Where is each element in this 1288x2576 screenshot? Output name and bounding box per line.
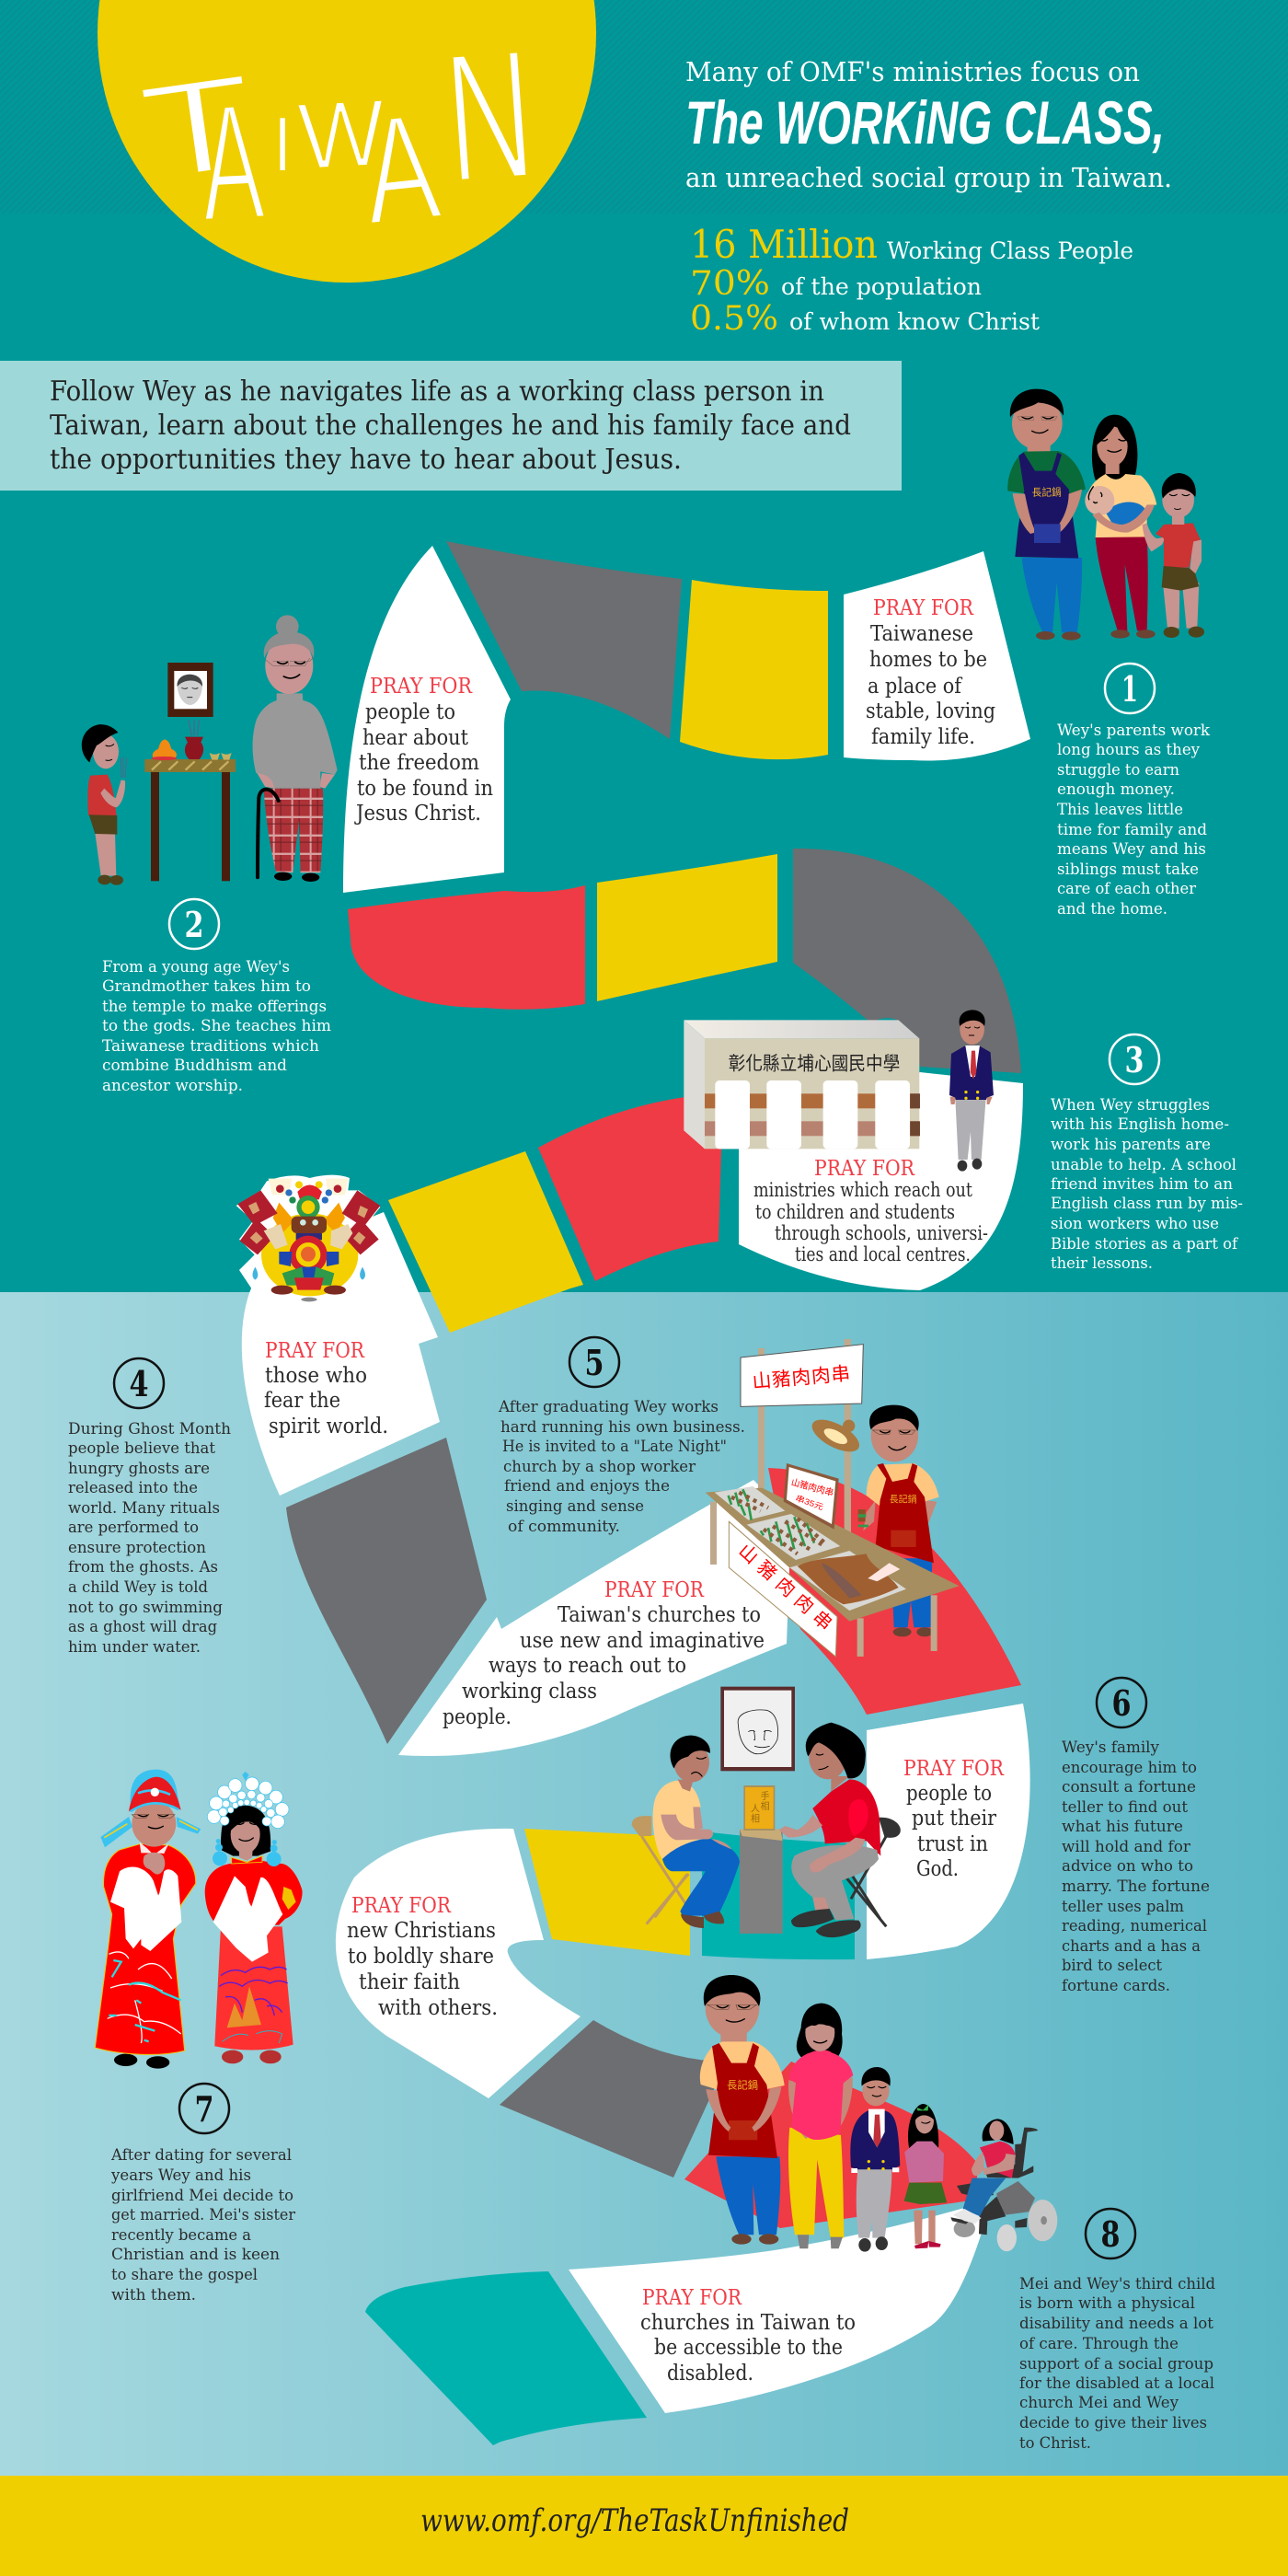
badge 8: 8 bbox=[1100, 2213, 1121, 2255]
background: light blue lower panel bbox=[0, 1292, 1288, 2477]
step 6: Wey's family bbox=[1062, 1739, 1159, 1757]
step 4: from the ghosts. As bbox=[68, 1558, 218, 1577]
step 7: recently became a bbox=[111, 2226, 251, 2245]
step 8: for the disabled at a local bbox=[1019, 2374, 1214, 2393]
badge 7: 7 bbox=[195, 2088, 213, 2130]
pray block: ministries to students: ties and local centres. bbox=[795, 1243, 971, 1265]
step 2: the temple to make offerings bbox=[102, 998, 327, 1016]
step 3: work his parents are bbox=[1051, 1136, 1211, 1154]
step 1: means Wey and his bbox=[1057, 840, 1206, 859]
step 6: teller to find out bbox=[1062, 1798, 1188, 1817]
pray block: new Christians: PRAY FOR bbox=[351, 1894, 452, 1918]
step 4: people believe that bbox=[68, 1439, 215, 1458]
pray block: freedom in Christ: people to bbox=[365, 700, 455, 724]
badge 8 bbox=[1086, 2209, 1135, 2258]
pray block: new Christians: with others. bbox=[378, 1996, 498, 2020]
illustration: Wey's family: 長記鍋 bbox=[1032, 486, 1062, 498]
step 5: friend and enjoys the bbox=[504, 1477, 670, 1496]
title: Taiwan bbox=[132, 9, 540, 257]
background: teal bbox=[0, 0, 1288, 1293]
illustration: fortune teller scene: 人 bbox=[751, 1803, 760, 1814]
badge 1: 1 bbox=[1121, 668, 1138, 710]
badge 5 bbox=[569, 1337, 619, 1387]
step 1: struggle to earn bbox=[1057, 761, 1179, 780]
badge 2: 2 bbox=[184, 904, 204, 945]
step 4 bbox=[68, 1358, 231, 1657]
background: striped header band bbox=[0, 0, 1288, 214]
step 5: hard running his own business. bbox=[500, 1418, 745, 1437]
step 1: care of each other bbox=[1057, 880, 1197, 898]
pray block: trust in God bbox=[903, 1757, 1005, 1881]
pray block: trust in God: people to bbox=[906, 1782, 992, 1806]
footer band bbox=[0, 2476, 1288, 2576]
illustration: school building and student: 彰化縣立埔心國民中學 bbox=[729, 1054, 900, 1075]
step 8: decide to give their lives bbox=[1019, 2414, 1207, 2432]
step 3: When Wey struggles bbox=[1051, 1096, 1210, 1115]
illustration: Wey's family bbox=[1007, 389, 1204, 641]
sun with Taiwan title bbox=[98, 0, 596, 283]
pray block: new Christians: their faith bbox=[359, 1970, 460, 1994]
step 7 bbox=[110, 2084, 296, 2305]
pray block: spirit world: fear the bbox=[264, 1389, 340, 1413]
step 7: years Wey and his bbox=[110, 2166, 251, 2185]
illustration: food stall: 山豬肉肉串 bbox=[790, 1476, 835, 1498]
pray block: spirit world bbox=[264, 1339, 388, 1438]
pray block: Taiwan's churches: Taiwan's churches to bbox=[558, 1603, 761, 1627]
intro band: Taiwan, learn about the challenges he and his family face and bbox=[50, 410, 851, 442]
pray block: new Christians bbox=[347, 1894, 498, 2020]
step 1: Wey's parents work bbox=[1057, 722, 1211, 740]
step 7: girlfriend Mei decide to bbox=[111, 2187, 293, 2205]
step 6: reading, numerical bbox=[1062, 1917, 1207, 1935]
badge 3: 3 bbox=[1124, 1039, 1144, 1080]
badge 4 bbox=[114, 1358, 164, 1408]
step 8 bbox=[1019, 2209, 1215, 2453]
step 2: Grandmother takes him to bbox=[102, 977, 311, 996]
pray block: Taiwan's churches bbox=[443, 1578, 765, 1729]
step 3: their lessons. bbox=[1051, 1254, 1153, 1273]
badge 7 bbox=[179, 2084, 229, 2133]
game path bbox=[242, 541, 1030, 2445]
step 2: Taiwanese traditions which bbox=[102, 1037, 319, 1056]
intro band bbox=[0, 361, 902, 491]
pray block: accessible churches: be accessible to the bbox=[654, 2336, 843, 2360]
pray block: ministries to students bbox=[753, 1157, 988, 1265]
step 6 bbox=[1062, 1678, 1210, 1995]
pray block: Taiwan's churches: ways to reach out to bbox=[489, 1654, 686, 1678]
statistics: Working Class People bbox=[887, 237, 1133, 264]
footer band: www.omf.org/TheTaskUnfinished bbox=[420, 2502, 849, 2539]
step 7: to share the gospel bbox=[111, 2266, 258, 2284]
step 3: with his English home- bbox=[1051, 1115, 1229, 1134]
step 4: world. Many rituals bbox=[68, 1499, 220, 1518]
step 6: teller uses palm bbox=[1062, 1898, 1184, 1916]
pray block: freedom in Christ: PRAY FOR bbox=[370, 675, 473, 699]
step 4: as a ghost will drag bbox=[68, 1618, 217, 1636]
pray block: new Christians: new Christians bbox=[347, 1919, 496, 1943]
step 1: siblings must take bbox=[1057, 861, 1199, 879]
statistics bbox=[690, 222, 1133, 338]
pray block: accessible churches: PRAY FOR bbox=[642, 2286, 742, 2310]
step 5: He is invited to a "Late Night" bbox=[502, 1438, 727, 1456]
illustration: food stall: 串35元 bbox=[794, 1493, 825, 1512]
pray block: trust in God: trust in bbox=[917, 1832, 988, 1856]
pray block: spirit world: PRAY FOR bbox=[265, 1339, 365, 1363]
step 1: time for family and bbox=[1057, 821, 1207, 839]
step 8: disability and needs a lot bbox=[1019, 2315, 1213, 2333]
pray block: accessible churches: disabled. bbox=[667, 2362, 753, 2385]
pray block: Taiwan's churches: PRAY FOR bbox=[604, 1578, 705, 1602]
pray block: trust in God: put their bbox=[912, 1807, 996, 1831]
step 2: to the gods. She teaches him bbox=[102, 1017, 331, 1035]
illustration: fortune teller scene: 相 bbox=[761, 1800, 770, 1812]
step 5 bbox=[498, 1337, 745, 1536]
title: Taiwan: W bbox=[295, 79, 388, 190]
pray block: Taiwan's churches: use new and imaginative bbox=[520, 1629, 765, 1653]
badge 6: 6 bbox=[1111, 1682, 1132, 1724]
step 1: and the home. bbox=[1057, 900, 1167, 918]
illustration: temple boy and grandmother bbox=[82, 615, 338, 885]
pray block: ministries to students: through schools, universi- bbox=[775, 1222, 988, 1244]
illustration: fortune teller scene: 手 bbox=[761, 1790, 770, 1802]
pray block: Taiwanese homes: PRAY FOR bbox=[873, 596, 974, 620]
illustration: school building and student bbox=[684, 1010, 994, 1172]
step 8: to Christ. bbox=[1019, 2434, 1091, 2453]
badge 5: 5 bbox=[585, 1342, 604, 1383]
step 8: Mei and Wey's third child bbox=[1019, 2275, 1215, 2293]
step 5: of community. bbox=[508, 1518, 620, 1536]
step 5: church by a shop worker bbox=[503, 1458, 696, 1476]
pray block: Taiwan's churches: people. bbox=[443, 1705, 512, 1729]
illustration: food stall: 長記鍋 bbox=[890, 1494, 917, 1506]
pray block: accessible churches bbox=[640, 2286, 856, 2385]
statistics: 70% bbox=[690, 265, 770, 303]
header statement: Many of OMF's ministries focus on bbox=[685, 56, 1140, 87]
badge 4: 4 bbox=[129, 1363, 149, 1404]
title: Taiwan: A bbox=[355, 80, 446, 257]
title: Taiwan: T bbox=[132, 46, 264, 209]
step 1 bbox=[1057, 664, 1211, 918]
badge 3 bbox=[1110, 1034, 1159, 1084]
pray block: freedom in Christ: Jesus Christ. bbox=[354, 802, 481, 826]
illustration: Wey and Mei's family with wheelchair: 長記鍋 bbox=[727, 2078, 758, 2091]
step 8: of care. Through the bbox=[1019, 2335, 1179, 2353]
step 8: church Mei and Wey bbox=[1019, 2394, 1179, 2412]
pray block: ministries to students: to children and students bbox=[755, 1201, 955, 1223]
step 4: During Ghost Month bbox=[68, 1420, 231, 1438]
step 5: singing and sense bbox=[506, 1497, 644, 1516]
step 2 bbox=[102, 899, 331, 1095]
illustration: food stall bbox=[706, 1339, 960, 1657]
step 6: marry. The fortune bbox=[1062, 1877, 1210, 1896]
step 6: bird to select bbox=[1062, 1957, 1162, 1975]
badge 6 bbox=[1097, 1678, 1146, 1727]
step 8: is born with a physical bbox=[1019, 2294, 1195, 2313]
step 4: are performed to bbox=[68, 1519, 199, 1537]
step 7: After dating for several bbox=[110, 2146, 292, 2165]
pray block: Taiwanese homes: homes to be bbox=[869, 648, 987, 672]
step 4: a child Wey is told bbox=[68, 1578, 208, 1597]
badge 1 bbox=[1105, 664, 1155, 713]
step 1: This leaves little bbox=[1057, 801, 1183, 819]
title: Taiwan: A bbox=[196, 68, 268, 256]
illustration: wedding couple bbox=[95, 1770, 303, 2069]
step 5: After graduating Wey works bbox=[498, 1398, 719, 1416]
step 6: encourage him to bbox=[1062, 1759, 1197, 1777]
pray block: Taiwanese homes: family life. bbox=[871, 725, 975, 749]
pray block: Taiwanese homes: a place of bbox=[868, 675, 962, 699]
step 6: consult a fortune bbox=[1062, 1778, 1196, 1796]
step 4: hungry ghosts are bbox=[68, 1460, 210, 1478]
pray block: Taiwanese homes: Taiwanese bbox=[870, 622, 973, 646]
pray block: spirit world: those who bbox=[265, 1364, 367, 1388]
pray block: freedom in Christ: hear about bbox=[362, 726, 469, 750]
pray block: new Christians: to boldly share bbox=[348, 1945, 494, 1969]
step 1: enough money. bbox=[1057, 780, 1175, 799]
pray block: Taiwanese homes bbox=[866, 596, 995, 749]
pray block: ministries to students: ministries which reach out bbox=[753, 1179, 972, 1201]
pray block: freedom in Christ: the freedom bbox=[359, 751, 479, 775]
step 3 bbox=[1051, 1034, 1243, 1273]
pray block: trust in God: God. bbox=[916, 1857, 959, 1881]
pray block: freedom in Christ: to be found in bbox=[357, 777, 493, 801]
statistics: 0.5% bbox=[690, 300, 778, 338]
pray block: trust in God: PRAY FOR bbox=[903, 1757, 1005, 1781]
illustration: fortune teller scene bbox=[632, 1687, 901, 1937]
step 6: charts and a has a bbox=[1062, 1937, 1201, 1956]
step 3: unable to help. A school bbox=[1051, 1156, 1236, 1174]
pray block: accessible churches: churches in Taiwan to bbox=[640, 2311, 856, 2335]
step 3: English class run by mis- bbox=[1051, 1195, 1243, 1213]
step 4: him under water. bbox=[68, 1638, 201, 1657]
header statement: an unreached social group in Taiwan. bbox=[685, 162, 1172, 193]
statistics: of whom know Christ bbox=[789, 308, 1040, 335]
pray block: spirit world: spirit world. bbox=[269, 1415, 388, 1438]
pray block: Taiwanese homes: stable, loving bbox=[866, 699, 995, 723]
pray block: ministries to students: PRAY FOR bbox=[814, 1157, 915, 1181]
step 2: From a young age Wey's bbox=[102, 958, 290, 976]
step 4: released into the bbox=[68, 1479, 198, 1497]
step 3: friend invites him to an bbox=[1051, 1175, 1233, 1194]
statistics: 16 Million bbox=[690, 222, 878, 267]
illustration: food stall: 山豬肉肉串 bbox=[734, 1540, 836, 1635]
header statement bbox=[685, 56, 1172, 193]
step 1: long hours as they bbox=[1057, 741, 1200, 759]
step 7: Christian and is keen bbox=[111, 2246, 280, 2264]
title: Taiwan: I bbox=[272, 101, 293, 189]
statistics: of the population bbox=[781, 273, 982, 300]
step 7: with them. bbox=[111, 2286, 196, 2305]
illustration: Wey and Mei's family with wheelchair bbox=[700, 1975, 1057, 2252]
badge 2 bbox=[169, 899, 219, 949]
step 6: advice on who to bbox=[1062, 1857, 1193, 1876]
illustration: food stall: 山豬肉肉串 bbox=[752, 1363, 851, 1392]
pray block: freedom in Christ bbox=[354, 675, 493, 826]
illustration: fortune teller scene: 相 bbox=[751, 1812, 760, 1824]
step 8: support of a social group bbox=[1019, 2355, 1213, 2374]
step 4: ensure protection bbox=[68, 1539, 206, 1557]
step 3: Bible stories as a part of bbox=[1051, 1235, 1239, 1253]
step 4: not to go swimming bbox=[68, 1599, 223, 1617]
step 3: sion workers who use bbox=[1051, 1215, 1219, 1233]
title: Taiwan: N bbox=[439, 9, 540, 222]
step 7: get married. Mei's sister bbox=[111, 2206, 296, 2224]
step 6: fortune cards. bbox=[1062, 1977, 1170, 1995]
illustration: ghost month mascot bbox=[236, 1175, 380, 1301]
step 6: will hold and for bbox=[1062, 1838, 1191, 1856]
pray block: Taiwan's churches: working class bbox=[462, 1680, 597, 1704]
step 2: ancestor worship. bbox=[102, 1077, 243, 1095]
step 6: what his future bbox=[1062, 1818, 1183, 1836]
intro band: Follow Wey as he navigates life as a working class person in bbox=[50, 375, 824, 408]
intro band: the opportunities they have to hear about Jesus. bbox=[50, 444, 682, 476]
step 2: combine Buddhism and bbox=[102, 1057, 287, 1075]
